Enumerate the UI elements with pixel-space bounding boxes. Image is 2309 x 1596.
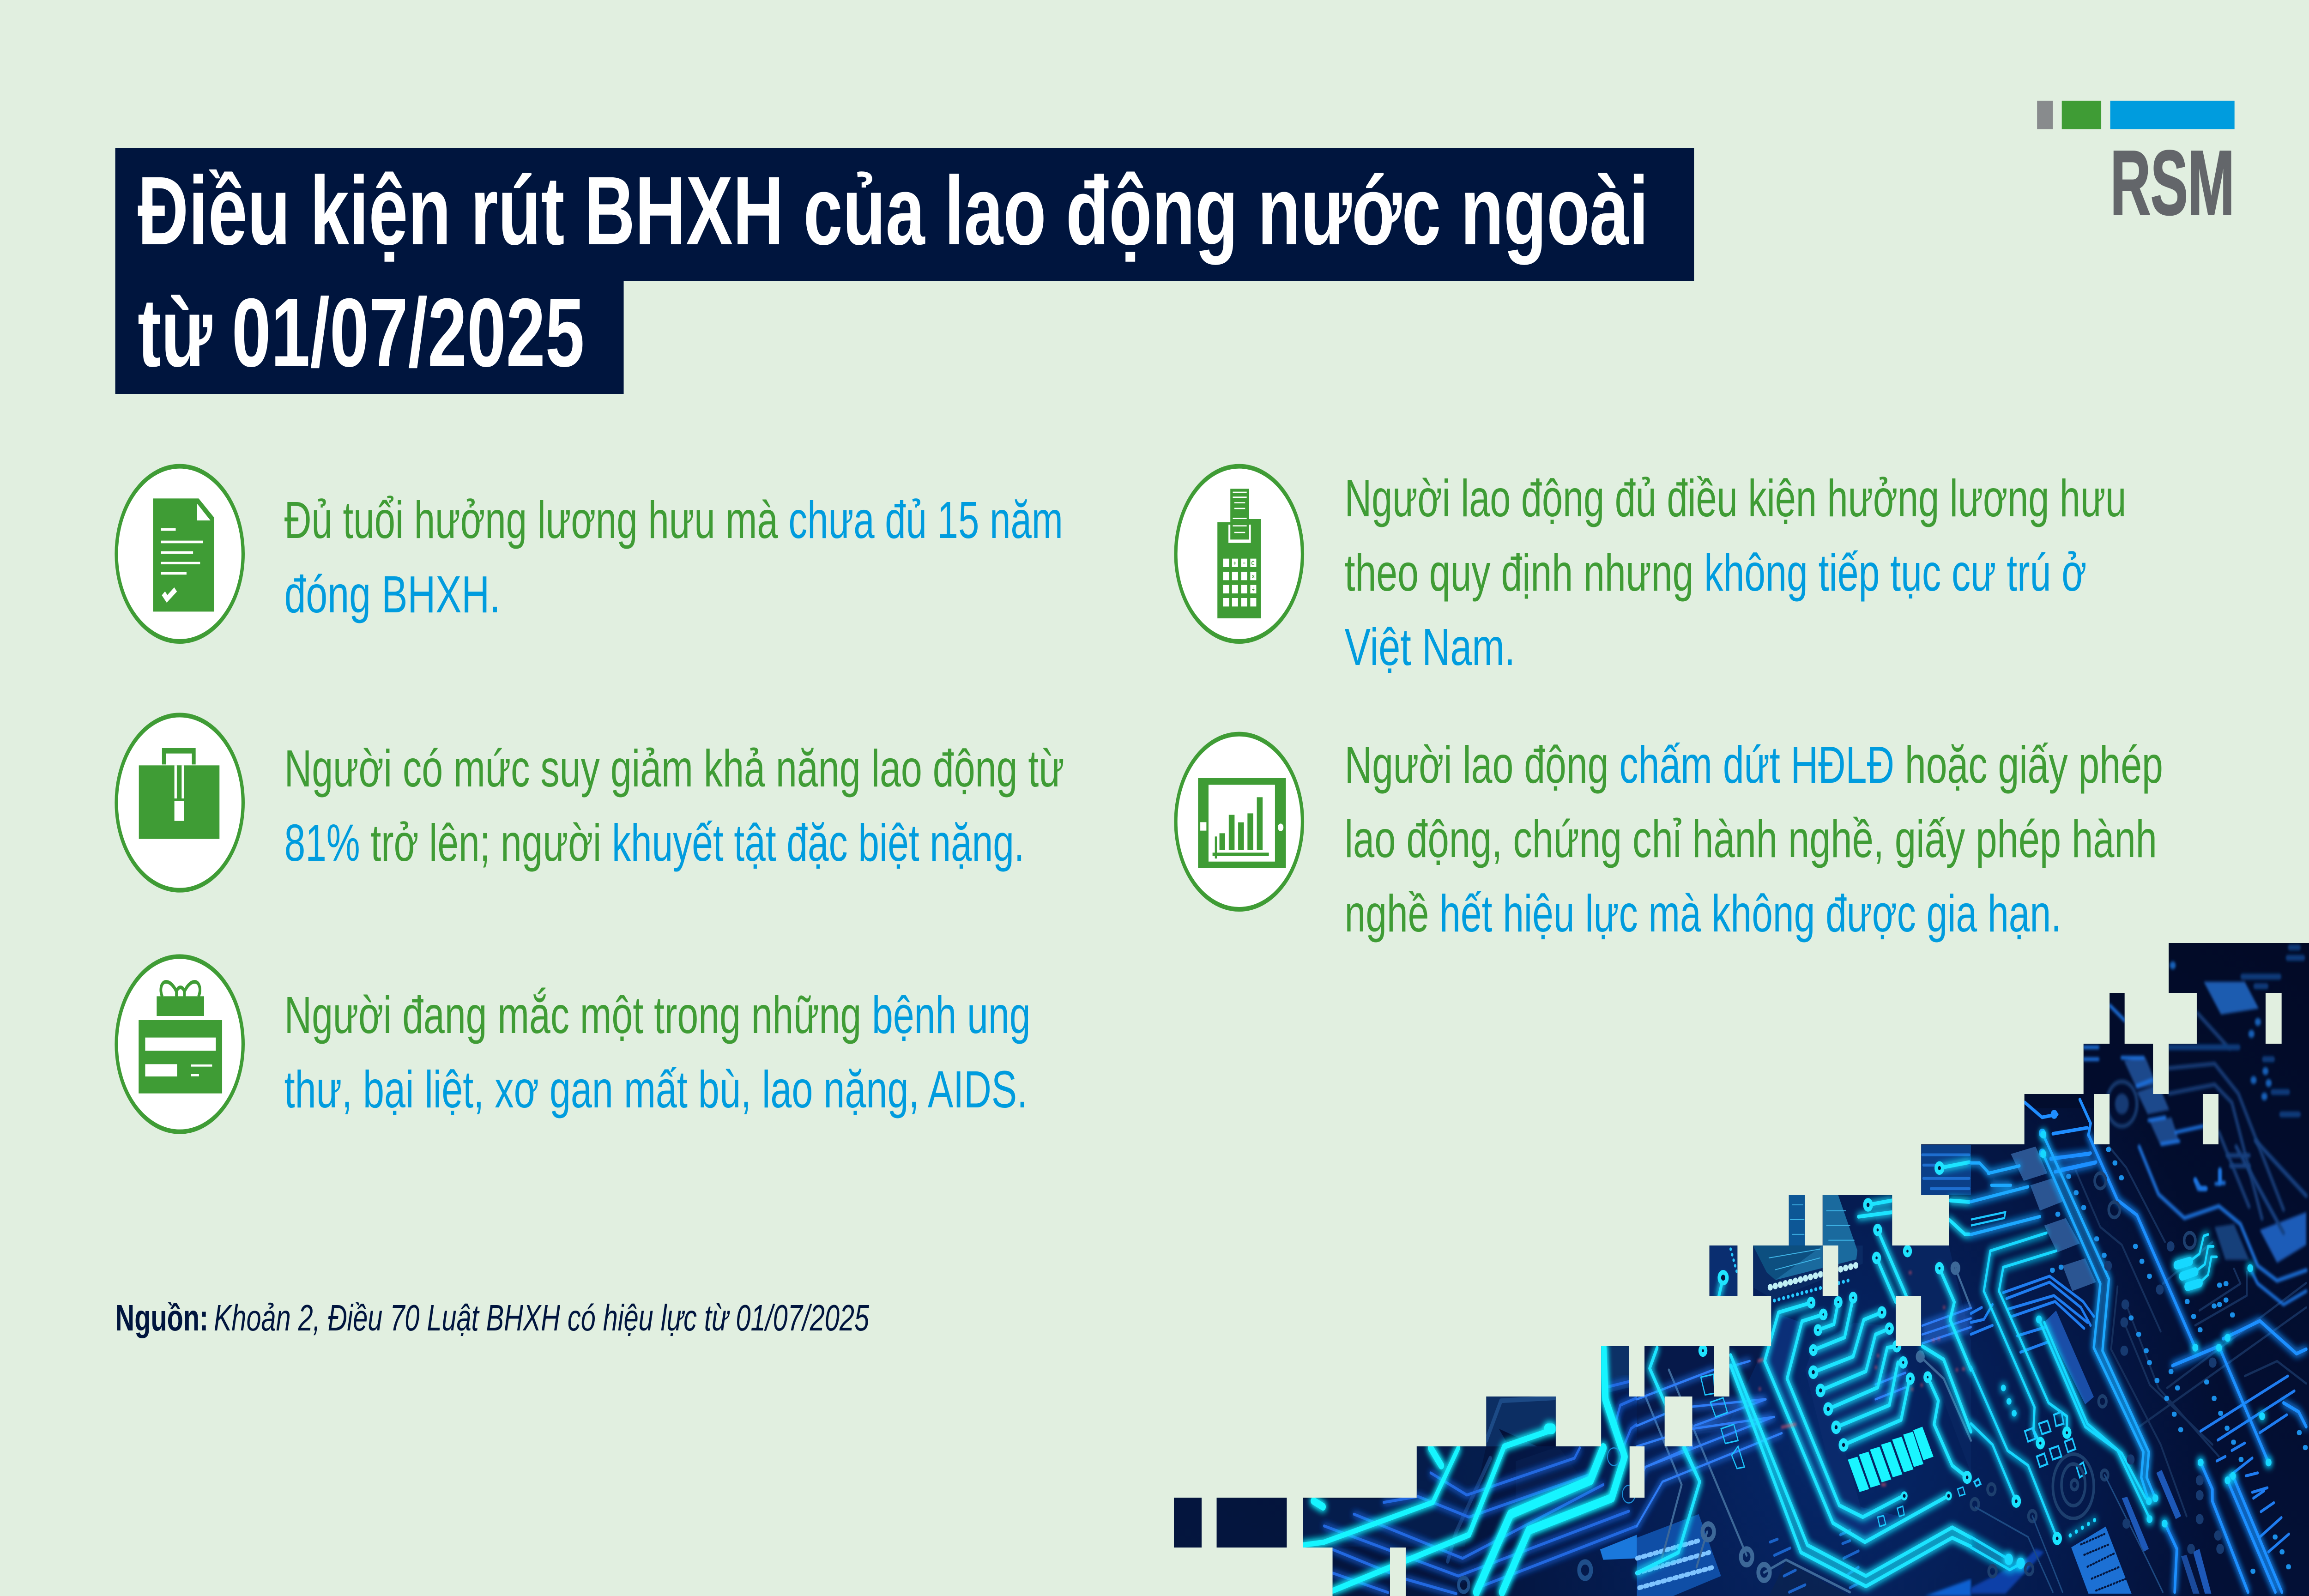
text: condition 5: lao động, chứng chỉ hành nghề, giấy phép hành xyxy=(1345,810,2157,868)
text: condition 2: Người có mức suy giảm khả năng lao động từ xyxy=(284,739,1064,798)
icon: calculator with receipt xyxy=(1176,466,1302,641)
icon: calculator with receipt: C xyxy=(1251,559,1255,567)
circuit: left low section xyxy=(1303,1346,1637,1594)
icon: gift card xyxy=(116,956,243,1132)
text: condition 3: thư, bại liệt, xơ gan mất bù, lao nặng, AIDS. xyxy=(284,1060,1028,1118)
text: condition 4: Việt Nam. xyxy=(1345,618,1515,676)
title: từ 01/07/2025 xyxy=(138,278,585,387)
circuit: central chip and traces xyxy=(1637,1145,1971,1596)
text: condition 5 xyxy=(1345,736,2163,943)
text: condition 4: theo quy định nhưng không tiếp tục cư trú ở xyxy=(1345,544,2086,602)
text: condition 3: Người đang mắc một trong những bệnh ung xyxy=(284,986,1031,1044)
source note: Nguồn: xyxy=(115,1297,208,1338)
icon: calculator with receipt: − xyxy=(1243,559,1245,567)
circuit: right traces xyxy=(1971,1135,2306,1594)
image: pixelated circuit board xyxy=(1169,937,2309,1596)
icon: briefcase xyxy=(116,715,243,890)
text: condition 1 xyxy=(284,491,1063,623)
title xyxy=(115,148,1694,394)
text: condition 5: nghề hết hiệu lực mà không được gia hạn. xyxy=(1345,884,2061,943)
text: condition 4 xyxy=(1345,469,2126,676)
logo: RSM: RSM xyxy=(2110,132,2235,234)
title: Điều kiện rút BHXH của lao động nước ngoài xyxy=(138,157,1649,266)
icon: document with check xyxy=(116,466,243,641)
circuit: top right blurred area xyxy=(2025,948,2303,1219)
text: condition 1: đóng BHXH. xyxy=(284,565,501,623)
icon: calculator with receipt: × xyxy=(1252,573,1255,580)
icon: calculator with receipt: ÷ xyxy=(1252,586,1255,593)
logo: RSM xyxy=(2037,101,2235,234)
text: condition 2 xyxy=(284,739,1064,872)
text: condition 1: Đủ tuổi hưởng lương hưu mà chưa đủ 15 năm xyxy=(284,491,1063,549)
text: condition 3 xyxy=(284,986,1031,1118)
text: condition 5: Người lao động chấm dứt HĐLĐ hoặc giấy phép xyxy=(1345,736,2163,794)
icon: calculator with receipt: + xyxy=(1233,559,1236,567)
source note: Khoản 2, Điều 70 Luật BHXH có hiệu lực từ 01/07/2025 xyxy=(214,1297,869,1338)
text: condition 4: Người lao động đủ điều kiện hưởng lương hưu xyxy=(1345,469,2126,527)
text: condition 2: 81% trở lên; người khuyết tật đặc biệt nặng. xyxy=(284,814,1025,872)
icon: tablet with bar chart xyxy=(1176,734,1302,909)
